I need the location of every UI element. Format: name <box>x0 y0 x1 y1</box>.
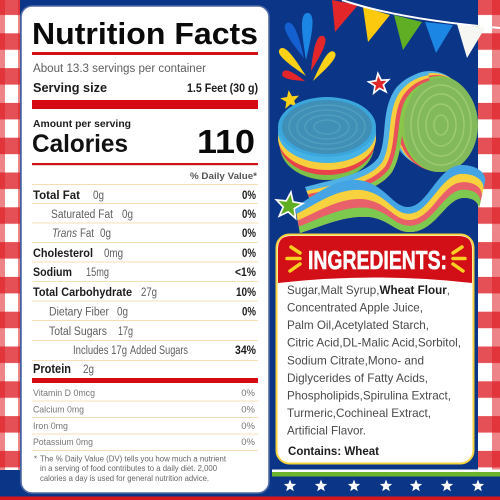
nutrient rows: Cholesterol <box>33 248 93 260</box>
nutrient rows: Added Sugars <box>130 345 188 357</box>
ingredients list: Concentrated Apple Juice, <box>287 300 423 314</box>
ingredients header band: INGREDIENTS: <box>308 245 447 275</box>
nutrient rows: Sodium <box>33 267 72 279</box>
nutrient rows: 0% <box>242 306 256 318</box>
vitamins and minerals: Iron 0mg <box>33 421 68 432</box>
ingredients list: Artificial Flavor. <box>287 424 366 438</box>
footnote: in a serving of food contributes to a daily diet. 2,000 <box>40 464 218 473</box>
nutrient rows: 0g <box>93 190 104 202</box>
servings per container: About 13.3 servings per container <box>33 63 206 75</box>
vitamins and minerals: Potassium 0mg <box>33 437 93 448</box>
calories block: Amount per serving <box>33 118 131 130</box>
nutrient rows: <1% <box>235 267 256 279</box>
candy: wavy ribbon <box>295 165 485 233</box>
icon: red star <box>368 73 390 93</box>
nutrient rows: Includes 17g <box>73 345 127 357</box>
panel: ingredients <box>276 234 474 464</box>
icon: yellow star <box>279 89 301 109</box>
nutrient rows: 0% <box>242 248 256 260</box>
nutrient rows: 0g <box>122 209 133 221</box>
nutrient rows: Saturated Fat <box>51 209 114 221</box>
ingredients list <box>287 283 461 438</box>
footnote: * <box>34 454 37 464</box>
nutrient rows: 15mg <box>86 267 109 279</box>
vitamins and minerals <box>32 388 258 451</box>
calories block <box>32 118 255 160</box>
nutrient rows: Total Fat <box>33 190 80 202</box>
nutrient rows: Dietary Fiber <box>49 306 109 318</box>
nutrient rows: Fat <box>80 228 95 240</box>
ingredients list: Sodium Citrate,Mono- and <box>287 353 424 367</box>
nutrient rows <box>33 190 256 376</box>
calories block: Calories <box>32 130 128 158</box>
nutrient rows: 0g <box>100 228 111 240</box>
vitamins and minerals: 0% <box>241 437 256 448</box>
bunting <box>332 0 500 58</box>
footnote <box>34 454 227 483</box>
serving size row <box>33 81 258 95</box>
daily value header: % Daily Value* <box>190 171 257 182</box>
gingham border: right <box>478 0 500 470</box>
footer band with stars <box>0 470 500 500</box>
ingredients list: Citric Acid,DL-Malic Acid,Sorbitol, <box>287 336 461 350</box>
ingredients list: Turmeric,Cochineal Extract, <box>287 406 431 420</box>
footnote: calories a day is used for general nutrition advice. <box>40 474 209 483</box>
nutrient rows: 0% <box>242 209 256 221</box>
vitamins and minerals: 0% <box>241 388 256 399</box>
candy: green roll side <box>390 71 477 172</box>
nutrient rows: Trans <box>52 228 77 240</box>
nutrient rows: 2g <box>83 364 94 376</box>
icon: firework burst <box>277 13 338 85</box>
nutrient rows: 10% <box>236 287 256 299</box>
nutrient rows: Total Carbohydrate <box>33 287 132 299</box>
ingredients list: Diglycerides of Fatty Acids, <box>287 371 428 385</box>
panel: nutrition facts card <box>21 6 269 493</box>
ingredients list: Phospholipids,Spirulina Extract, <box>287 388 451 402</box>
gingham border: left <box>0 0 20 470</box>
serving size row: 1.5 Feet (30 g) <box>187 83 258 95</box>
allergen statement: Contains: Wheat <box>288 444 379 458</box>
ingredients header band <box>278 236 472 283</box>
nutrient rows: 27g <box>141 287 157 299</box>
vitamins and minerals: Calcium 0mg <box>33 404 84 416</box>
nutrient rows: 34% <box>235 343 256 357</box>
serving size row: Serving size <box>33 81 107 95</box>
vitamins and minerals: 0% <box>241 421 256 432</box>
vitamins and minerals: Vitamin D 0mcg <box>33 388 95 399</box>
ingredients list: Sugar,Malt Syrup,Wheat Flour, <box>287 283 450 297</box>
candy: unrolled ribbon <box>305 72 430 200</box>
nutrient rows: 0% <box>242 228 256 240</box>
icon: green star <box>274 190 304 219</box>
candy: blue roll <box>278 97 376 180</box>
nutrient rows: Protein <box>33 362 71 376</box>
nutrient rows: Total Sugars <box>49 326 107 338</box>
ingredients list: Palm Oil,Acetylated Starch, <box>287 318 429 332</box>
calories block: 110 <box>197 123 255 160</box>
nutrient rows: 0mg <box>104 248 123 260</box>
footnote: The % Daily Value (DV) tells you how much a nutrient <box>40 454 227 464</box>
nutrient rows: 0% <box>242 190 256 202</box>
candy: green roll face <box>404 78 478 172</box>
vitamins and minerals: 0% <box>241 404 256 416</box>
nutrient rows: 17g <box>118 326 133 338</box>
nutrient rows: 0g <box>117 306 128 318</box>
title: Nutrition Facts <box>32 17 258 51</box>
